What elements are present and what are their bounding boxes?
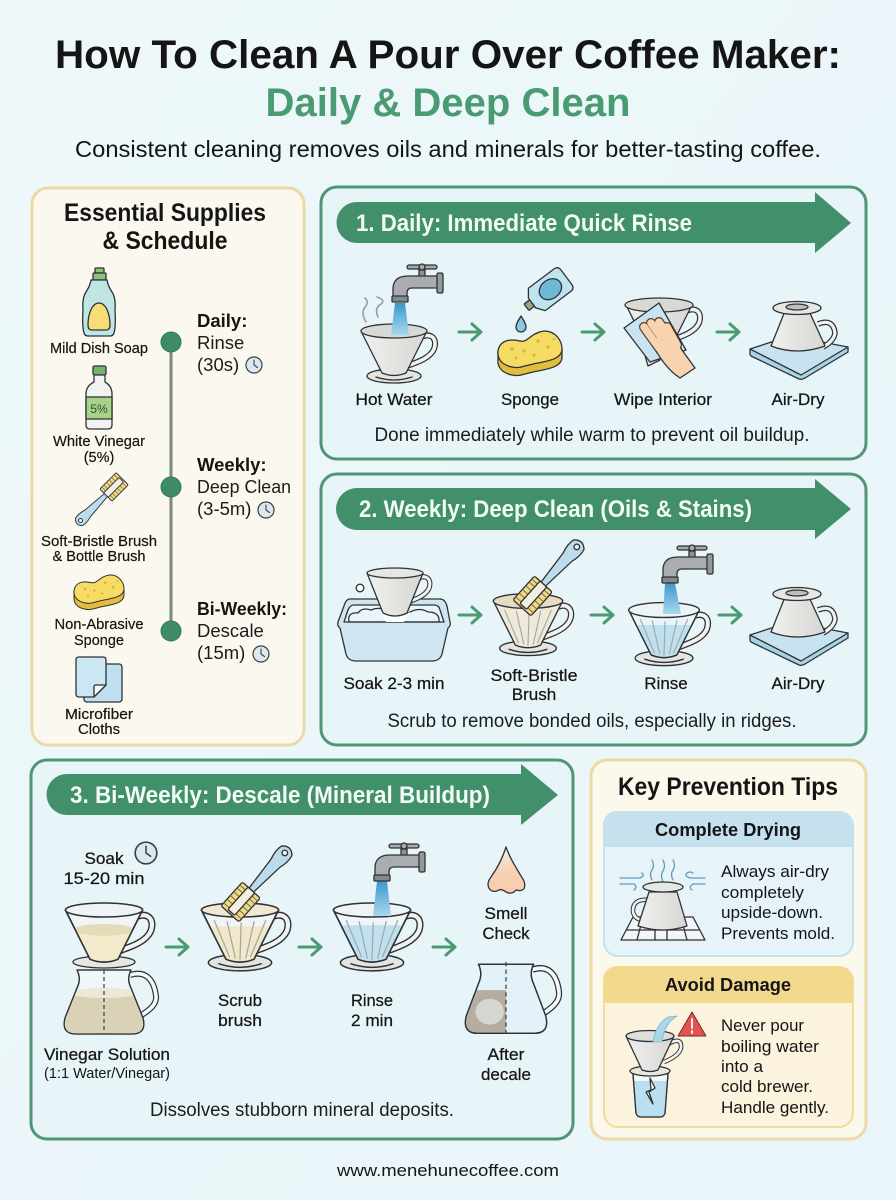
step labels: Rinse bbox=[644, 674, 688, 693]
label: scrub brush bbox=[218, 991, 262, 1030]
label: non-abrasive sponge bbox=[54, 617, 144, 649]
step labels bbox=[356, 390, 825, 409]
label: non-abrasive sponge: Non-Abrasive bbox=[54, 617, 144, 633]
subtitle: Consistent cleaning removes oils and minerals for better-tasting coffee. bbox=[75, 136, 821, 162]
tip text: damage: boiling water bbox=[721, 1037, 819, 1056]
icon: dish soap bbox=[83, 268, 115, 336]
title: How To Clean A Pour Over Coffee Maker: bbox=[55, 33, 841, 77]
panel: weekly deep clean bbox=[321, 474, 866, 745]
icon: rinsing dripper bbox=[629, 545, 713, 666]
tip text: damage: Handle gently. bbox=[721, 1098, 829, 1117]
arrow bbox=[582, 324, 604, 340]
heading: complete drying: Complete Drying bbox=[655, 819, 801, 840]
tip text: drying: upside-down. bbox=[721, 903, 823, 922]
banner: weekly: 2. Weekly: Deep Clean (Oils & Stains) bbox=[359, 496, 752, 523]
label: soak time: Soak bbox=[84, 849, 124, 868]
arrow bbox=[591, 607, 613, 623]
icon: rinse 2 min bbox=[330, 843, 425, 971]
banner: daily bbox=[336, 192, 851, 253]
schedule: weekly: (3-5m) bbox=[197, 498, 251, 519]
panel: key prevention tips bbox=[591, 760, 866, 1139]
arrow bbox=[459, 324, 481, 340]
heading: avoid damage: Avoid Damage bbox=[665, 974, 791, 995]
step labels: Air-Dry bbox=[772, 674, 825, 693]
label: soak time bbox=[64, 842, 157, 888]
card: avoid damage bbox=[603, 966, 853, 1127]
banner: bi-weekly: 3. Bi-Weekly: Descale (Mineral Buildup) bbox=[70, 782, 490, 809]
banner: weekly bbox=[336, 479, 851, 539]
icon: wiping interior bbox=[624, 298, 700, 378]
icon: dripper with brush bbox=[493, 534, 590, 656]
icon: soak in tub bbox=[338, 568, 450, 661]
step labels: Air-Dry bbox=[772, 390, 825, 409]
label: after decale bbox=[481, 1045, 531, 1084]
arrow bbox=[717, 324, 739, 340]
label: rinse 2 min: 2 min bbox=[351, 1011, 393, 1030]
icon: non-abrasive sponge bbox=[74, 575, 124, 610]
step labels: Hot Water bbox=[356, 390, 433, 409]
icon: carafe after descale bbox=[461, 962, 559, 1035]
schedule: bi-weekly bbox=[197, 598, 287, 663]
panel: daily quick rinse bbox=[321, 187, 866, 459]
step labels bbox=[344, 666, 825, 704]
icon: soap and sponge bbox=[498, 266, 575, 376]
icon: air-dry bbox=[750, 588, 848, 665]
label: scrub brush: brush bbox=[218, 1011, 262, 1030]
schedule: bi-weekly: (15m) bbox=[197, 642, 245, 663]
schedule timeline bbox=[161, 332, 181, 641]
step labels: Brush bbox=[512, 685, 556, 704]
step labels: Sponge bbox=[501, 390, 559, 409]
label: vinegar solution: (1:1 Water/Vinegar) bbox=[44, 1066, 170, 1082]
arrow bbox=[719, 607, 741, 623]
label: rinse 2 min: Rinse bbox=[351, 991, 393, 1010]
tip text: drying: Always air-dry bbox=[721, 862, 829, 881]
schedule: daily: Daily: bbox=[197, 310, 247, 331]
banner: daily: 1. Daily: Immediate Quick Rinse bbox=[356, 210, 692, 237]
arrow bbox=[459, 607, 481, 623]
schedule: daily bbox=[197, 310, 262, 375]
icon: dripper on carafe with vinegar bbox=[60, 903, 156, 1036]
label: after decale: After bbox=[488, 1045, 525, 1064]
schedule: bi-weekly: Descale bbox=[197, 620, 264, 641]
tip text: damage: into a bbox=[721, 1057, 764, 1076]
label: rinse 2 min bbox=[351, 991, 393, 1030]
label: microfiber cloths: Microfiber bbox=[65, 707, 133, 723]
tip text: damage: cold brewer. bbox=[721, 1077, 813, 1096]
arrow bbox=[299, 939, 321, 955]
label: smell check: Smell bbox=[484, 904, 528, 923]
label: soft-bristle brush bbox=[41, 534, 157, 565]
panel: bi-weekly descale bbox=[31, 760, 573, 1139]
tip text: damage: Never pour bbox=[721, 1016, 804, 1035]
label: after decale: decale bbox=[481, 1065, 531, 1084]
label: non-abrasive sponge: Sponge bbox=[74, 633, 124, 649]
label: vinegar solution bbox=[44, 1045, 170, 1082]
label: vinegar solution: Vinegar Solution bbox=[44, 1045, 170, 1064]
heading: supplies: Essential Supplies bbox=[64, 199, 266, 227]
label: soak time: 15-20 min bbox=[64, 869, 144, 888]
step labels: Wipe Interior bbox=[614, 390, 712, 409]
schedule: weekly: Weekly: bbox=[197, 454, 267, 475]
icon: nose bbox=[488, 847, 525, 893]
tip text: drying bbox=[721, 862, 835, 943]
heading: supplies: & Schedule bbox=[102, 227, 228, 255]
arrow bbox=[166, 939, 188, 955]
caption: Scrub to remove bonded oils, especially in ridges. bbox=[388, 711, 796, 732]
label: smell check: Check bbox=[482, 924, 530, 943]
title bbox=[55, 33, 841, 125]
footer url: www.menehunecoffee.com bbox=[336, 1161, 559, 1180]
icon: soft bristle brush bbox=[71, 473, 128, 530]
label: microfiber cloths bbox=[65, 707, 133, 738]
label: scrub brush: Scrub bbox=[218, 991, 262, 1010]
schedule: weekly bbox=[197, 454, 291, 519]
tip text: drying: Prevents mold. bbox=[721, 924, 835, 943]
banner: bi-weekly bbox=[46, 764, 558, 825]
tip text: drying: completely bbox=[721, 883, 805, 902]
schedule: weekly: Deep Clean bbox=[197, 476, 291, 497]
icon: white vinegar: 5% bbox=[90, 402, 108, 416]
icon: air-dry bbox=[750, 302, 848, 379]
heading: prevention tips: Key Prevention Tips bbox=[618, 773, 838, 801]
icon: cold glass with dripper bbox=[626, 1012, 706, 1117]
schedule: bi-weekly: Bi-Weekly: bbox=[197, 598, 287, 619]
label: dish soap: Mild Dish Soap bbox=[50, 341, 148, 357]
heading: supplies bbox=[64, 199, 266, 255]
tip text: damage bbox=[721, 1016, 829, 1117]
arrow bbox=[433, 939, 455, 955]
card: complete drying bbox=[603, 811, 853, 956]
label: white vinegar: White Vinegar bbox=[53, 434, 145, 450]
label: microfiber cloths: Cloths bbox=[78, 722, 120, 738]
label: smell check bbox=[482, 904, 530, 943]
step labels: Soak 2-3 min bbox=[344, 674, 444, 693]
icon: scrub with brush bbox=[200, 845, 293, 972]
icon: hot water dripper bbox=[361, 264, 443, 383]
schedule: daily: Rinse bbox=[197, 332, 244, 353]
caption: Dissolves stubborn mineral deposits. bbox=[150, 1100, 454, 1121]
caption: Done immediately while warm to prevent oil buildup. bbox=[374, 425, 810, 446]
label: soft-bristle brush: Soft-Bristle Brush bbox=[41, 534, 157, 550]
step labels: Soft-Bristle bbox=[490, 666, 578, 685]
panel: essential supplies and schedule bbox=[32, 188, 304, 745]
label: five percent: (5%) bbox=[84, 450, 114, 466]
icon: drying rack bbox=[620, 860, 705, 940]
label: soft-bristle brush: & Bottle Brush bbox=[52, 549, 146, 565]
icon: white vinegar bbox=[86, 366, 112, 429]
icon: microfiber cloths bbox=[76, 657, 122, 702]
schedule: daily: (30s) bbox=[197, 354, 239, 375]
title: Daily & Deep Clean bbox=[266, 81, 630, 125]
